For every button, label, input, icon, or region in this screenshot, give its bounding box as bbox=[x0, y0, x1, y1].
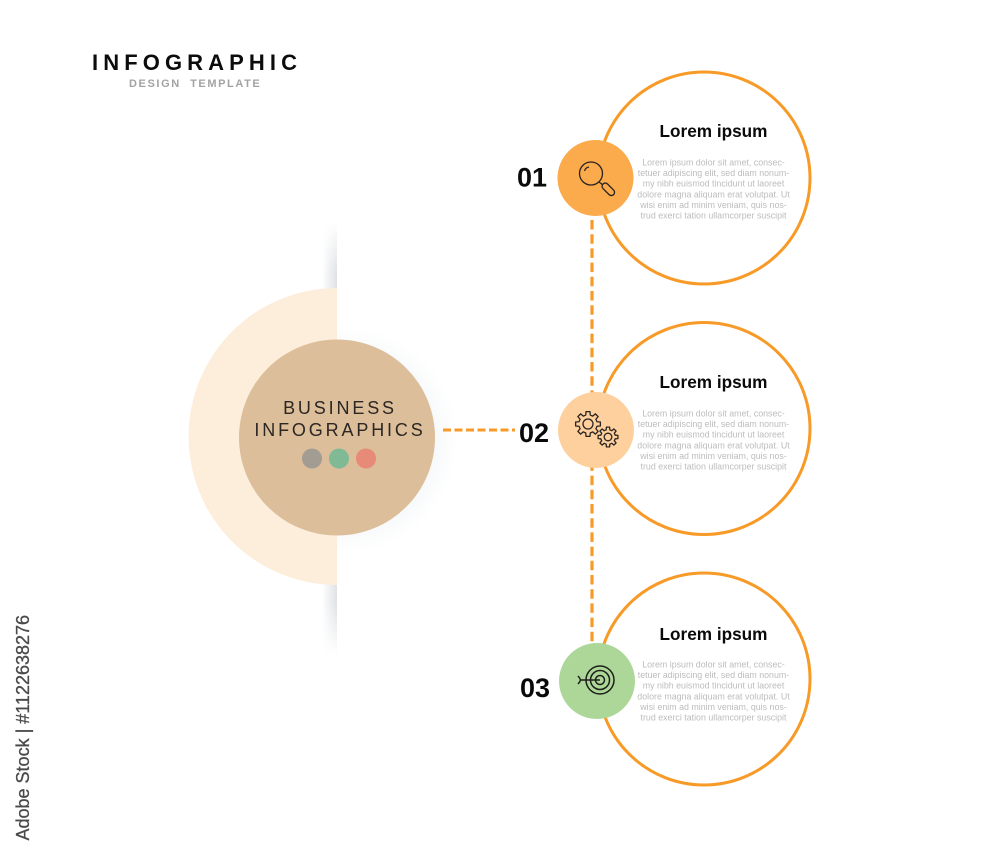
icon: gears bbox=[558, 392, 634, 468]
inner circle bbox=[239, 340, 435, 536]
panel: step 02 bbox=[598, 322, 810, 534]
panel: step 03 bbox=[598, 573, 810, 785]
stock credit: Adobe Stock | #1122638276 bbox=[13, 615, 33, 840]
panel: step 01: my nibh euismod tincidunt ut laoreet bbox=[643, 179, 785, 189]
panel: step 01: trud exerci tation ullamcorper suscipit bbox=[641, 210, 787, 220]
title: DESIGN TEMPLATE bbox=[129, 78, 261, 90]
panel: step 01: wisi enim ad minim veniam, quis nos- bbox=[639, 200, 787, 210]
number 03: 03 bbox=[520, 673, 550, 703]
panel: step 01: Lorem ipsum bbox=[660, 121, 767, 141]
panel: step 03: Lorem ipsum dolor sit amet, consec- bbox=[642, 660, 785, 670]
panel: step 01: tetuer adipiscing elit, sed diam nonum- bbox=[638, 168, 789, 178]
connector: emblem to timeline bbox=[443, 428, 515, 432]
panel: step 03: trud exerci tation ullamcorper suscipit bbox=[641, 712, 787, 722]
title bbox=[92, 50, 302, 90]
panel: step 02: my nibh euismod tincidunt ut laoreet bbox=[643, 430, 785, 440]
panel: step 01: dolore magna aliquam erat volutpat. Ut bbox=[637, 189, 790, 199]
panel: step 01: Lorem ipsum dolor sit amet, consec- bbox=[642, 158, 785, 168]
vertical dashed timeline bbox=[590, 220, 594, 645]
inner circle: INFOGRAPHICS bbox=[254, 420, 426, 440]
panel: step 02: tetuer adipiscing elit, sed diam nonum- bbox=[638, 419, 789, 429]
panel: step 03: tetuer adipiscing elit, sed diam nonum- bbox=[638, 670, 789, 680]
inner circle: BUSINESS bbox=[283, 398, 397, 418]
central half-circle emblem bbox=[189, 222, 459, 655]
icon: target bbox=[559, 643, 635, 719]
icon: magnifier bbox=[558, 140, 634, 216]
panel: step 02: dolore magna aliquam erat volutpat. Ut bbox=[637, 440, 790, 450]
panel: step 02: Lorem ipsum dolor sit amet, consec- bbox=[642, 408, 785, 418]
title: INFOGRAPHIC bbox=[92, 50, 302, 75]
panel: step 03: Lorem ipsum bbox=[660, 624, 767, 644]
panel: step 02: wisi enim ad minim veniam, quis nos- bbox=[639, 451, 787, 461]
number 02: 02 bbox=[519, 418, 549, 448]
panel: step 03: dolore magna aliquam erat volutpat. Ut bbox=[637, 691, 790, 701]
panel: step 03: wisi enim ad minim veniam, quis nos- bbox=[639, 702, 787, 712]
panel: step 01 bbox=[598, 72, 810, 284]
panel: step 03: my nibh euismod tincidunt ut laoreet bbox=[643, 681, 785, 691]
panel: step 02: Lorem ipsum bbox=[660, 372, 767, 392]
number 01: 01 bbox=[517, 162, 547, 192]
panel: step 02: trud exerci tation ullamcorper suscipit bbox=[641, 462, 787, 472]
